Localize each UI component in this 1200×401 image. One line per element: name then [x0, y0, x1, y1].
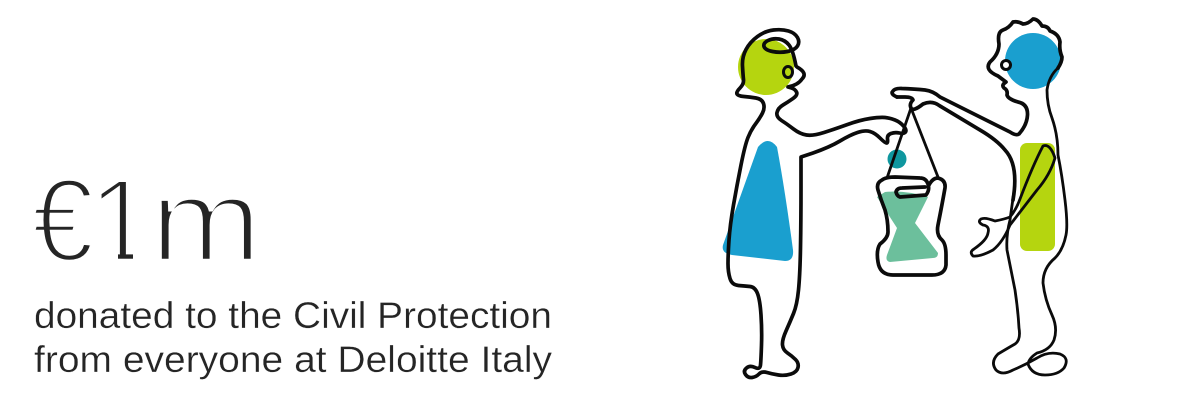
description text: from everyone at Deloitte Italy	[34, 339, 553, 380]
bag strings	[887, 108, 938, 178]
description text: donated to the Civil Protection	[34, 295, 552, 336]
teal circle	[888, 150, 906, 168]
right person head colour: blue circle	[1005, 33, 1061, 89]
right person outline	[892, 19, 1062, 135]
water bag outline with handle	[877, 177, 946, 275]
right person eye	[1002, 60, 1010, 70]
left person eye	[784, 66, 792, 78]
description text	[34, 295, 553, 380]
headline figure	[36, 180, 251, 260]
left person body colour: blue trapezoid	[723, 141, 793, 261]
illustration: two people passing a bag	[723, 19, 1067, 378]
headline figure: €	[32, 155, 94, 287]
left person outline	[728, 30, 906, 378]
right person lower arm and open hand	[971, 146, 1055, 256]
right person body colour: green rectangle	[1020, 143, 1055, 251]
left person head colour: green circle	[738, 39, 794, 95]
right person raised arm underside	[897, 97, 1015, 200]
headline figure: m	[150, 155, 262, 287]
hourglass shape in bag	[877, 192, 938, 262]
headline figure: 1	[88, 155, 154, 287]
right person back, leg and foot outline	[993, 68, 1067, 375]
